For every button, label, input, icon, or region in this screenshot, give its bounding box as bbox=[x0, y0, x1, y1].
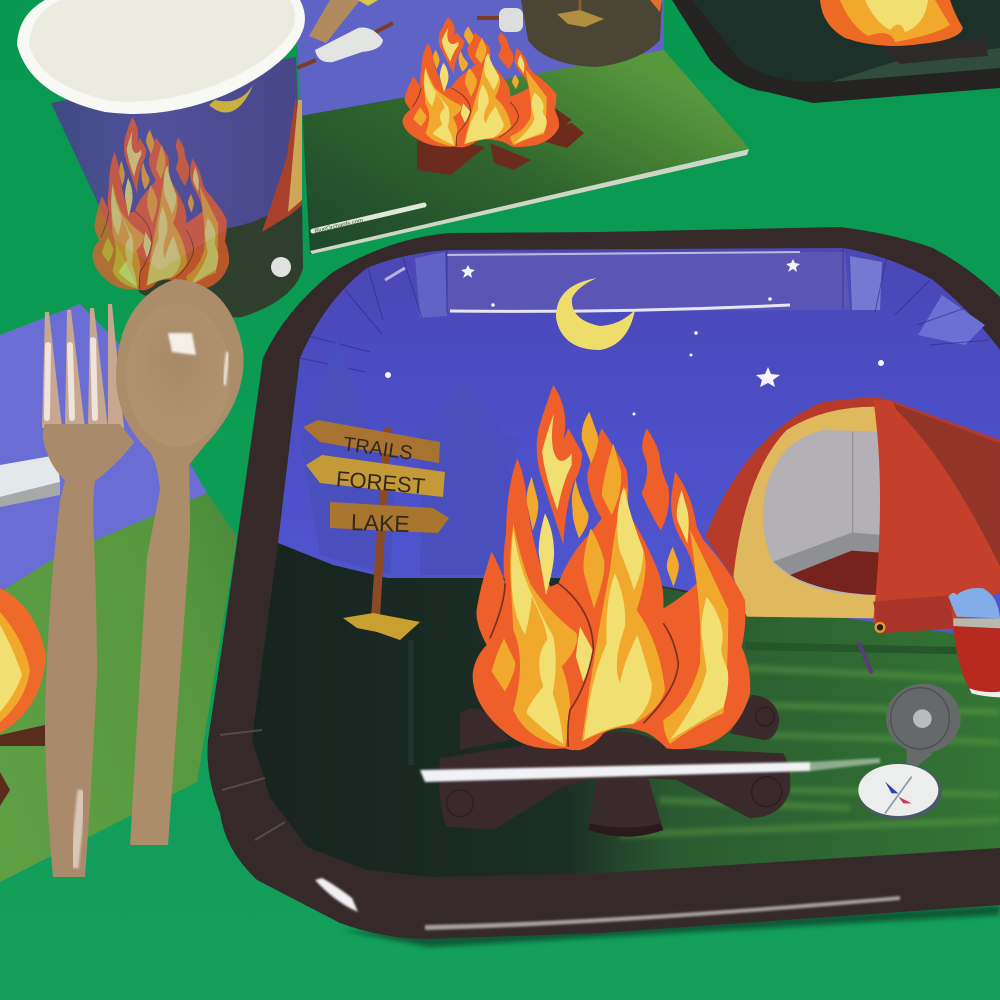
plate shadow on cloth bbox=[340, 905, 1000, 947]
trees bbox=[300, 338, 535, 575]
moon bbox=[556, 278, 635, 350]
tent grommet bbox=[876, 623, 884, 632]
signpost bbox=[303, 420, 449, 640]
sign: forest: FOREST bbox=[335, 466, 426, 499]
tent stake bbox=[858, 642, 872, 673]
plate ground stripes bbox=[620, 668, 1000, 835]
sign: forest bbox=[306, 455, 445, 499]
cup tent bbox=[262, 95, 302, 232]
sign: trails: TRAILS bbox=[342, 433, 414, 465]
rim panel highlights bbox=[850, 256, 882, 310]
corner creases bbox=[300, 248, 990, 372]
cup flames bbox=[92, 117, 229, 290]
printed web address strip: BlueOrchards.com bbox=[314, 218, 364, 235]
plate bbox=[208, 227, 1000, 939]
marshmallow band bbox=[0, 455, 60, 497]
plate sky bbox=[278, 248, 1000, 650]
compass lid bbox=[886, 684, 961, 767]
tent bbox=[705, 397, 1000, 820]
plate rim bbox=[208, 227, 1000, 939]
sign: trails bbox=[303, 420, 440, 465]
big flame bbox=[473, 385, 750, 750]
napkin fire bbox=[403, 17, 559, 147]
marshmallow on stick bbox=[297, 23, 393, 68]
plate ground bbox=[252, 543, 1000, 877]
cup moon bbox=[209, 85, 253, 113]
plate rim shine bbox=[425, 896, 900, 930]
compass bbox=[858, 764, 942, 820]
napkin logs bbox=[417, 108, 584, 175]
fire on napkin bbox=[0, 588, 46, 733]
stars bbox=[385, 259, 884, 416]
top-right plate bbox=[672, 0, 1000, 103]
roasting plank bbox=[309, 0, 360, 43]
thermos bbox=[948, 588, 1000, 697]
napkin: top with campfire bbox=[296, 0, 749, 254]
fork bbox=[42, 304, 134, 877]
napkin: left side under cutlery bbox=[0, 304, 237, 882]
logs bbox=[439, 695, 790, 837]
inner plate vertical sheen bbox=[408, 640, 414, 765]
cup compass bbox=[271, 257, 291, 277]
cup left bbox=[17, 0, 305, 317]
inner plate shine bbox=[420, 758, 880, 782]
spoon bbox=[116, 279, 244, 845]
printed web address strip bbox=[313, 205, 424, 235]
sign: lake: LAKE bbox=[350, 509, 410, 537]
napkin plies edge bbox=[310, 149, 749, 254]
marshmallow two bbox=[477, 8, 523, 32]
purple sheen band bbox=[447, 252, 850, 312]
cup on top bbox=[521, 0, 662, 67]
sign: lake bbox=[330, 502, 449, 537]
cup rim bbox=[17, 0, 305, 114]
